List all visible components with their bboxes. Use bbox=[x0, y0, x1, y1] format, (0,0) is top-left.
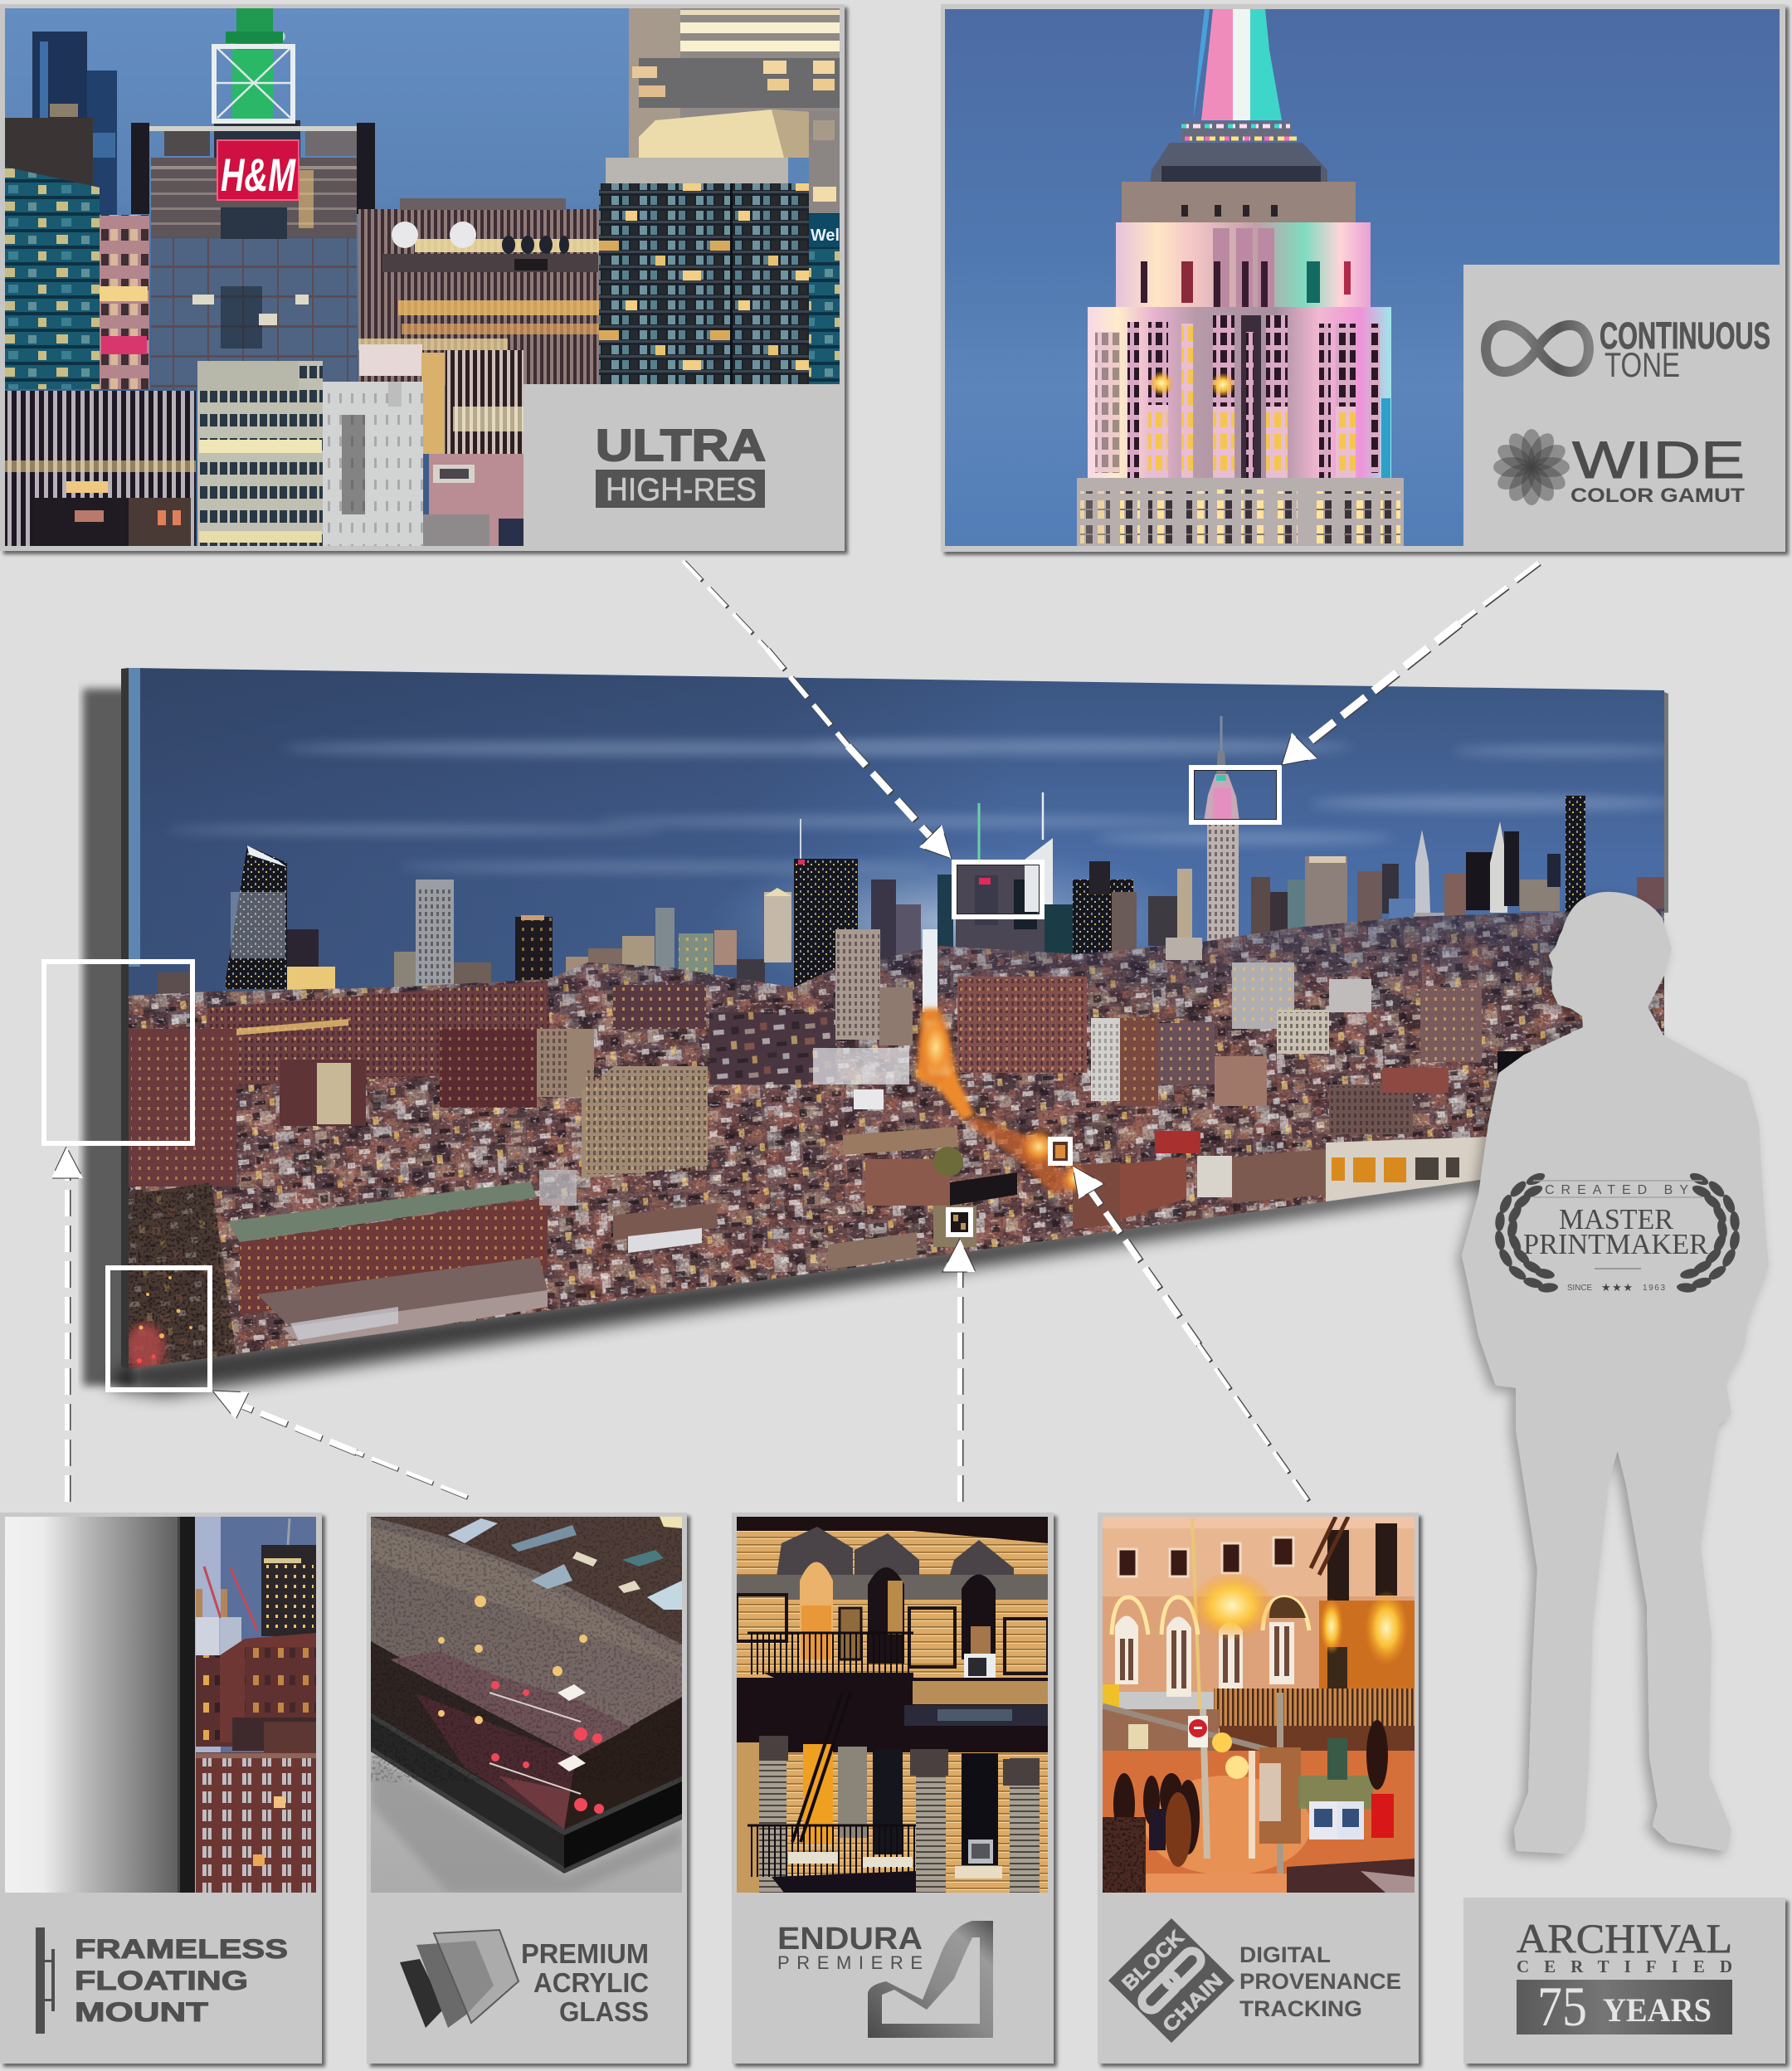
label: H&M sign: H&M bbox=[221, 149, 296, 201]
detail box: H&M building area bbox=[954, 862, 1042, 917]
panel: continuous tone and wide colour gamut detail bbox=[941, 4, 1785, 552]
icon: blockchain diamond: CHAIN bbox=[1158, 1969, 1228, 2037]
label: premium acrylic glass: PREMIUM bbox=[521, 1938, 649, 1969]
label: frameless floating mount: FRAMELESS bbox=[75, 1934, 288, 1964]
label: endura premiere: ENDURA bbox=[777, 1922, 923, 1956]
label: premium acrylic glass bbox=[400, 1930, 649, 2028]
badge: master printmaker: CREATED BY bbox=[1545, 1183, 1688, 1197]
badge: master printmaker bbox=[1493, 1171, 1741, 1294]
arrow: to ultra high-res panel detail bbox=[683, 561, 952, 859]
label box: continuous tone and wide colour gamut: WIDE bbox=[1572, 431, 1745, 490]
badge: master printmaker: SINCE bbox=[1567, 1284, 1592, 1293]
panel: archival certified 75 years: ARCHIVAL bbox=[1517, 1915, 1732, 1961]
wall shadow behind canvas bbox=[83, 689, 1668, 1396]
city mass bbox=[129, 900, 1664, 1373]
panel: archival certified 75 years: CERTIFIED bbox=[1517, 1956, 1732, 1976]
icon: flower bbox=[1493, 429, 1570, 505]
icon: acrylic layers bbox=[400, 1930, 519, 2028]
photo: acrylic corner bbox=[371, 1517, 682, 1893]
label: frameless floating mount: FLOATING bbox=[75, 1966, 248, 1995]
badge: master printmaker: PRINTMAKER bbox=[1523, 1228, 1709, 1260]
photo: street corner at dusk bbox=[1103, 1517, 1415, 1893]
label: frameless floating mount: MOUNT bbox=[75, 1997, 209, 2027]
panel: ultra high-res detail bbox=[0, 4, 845, 551]
label: digital provenance tracking bbox=[1108, 1918, 1401, 2043]
arrow: to wide colour gamut panel detail bbox=[1282, 563, 1540, 765]
label: digital provenance tracking: TRACKING bbox=[1239, 1996, 1362, 2021]
badge: master printmaker: MASTER bbox=[1559, 1203, 1674, 1235]
detail box: street corner bbox=[1050, 1139, 1070, 1163]
trees and lit street at the lower left corner bbox=[125, 1182, 236, 1373]
photo: midtown buildings with H&M sign bbox=[5, 8, 840, 546]
label: frameless floating mount bbox=[36, 1927, 288, 2034]
panel: archival certified 75 years: YEARS bbox=[1603, 1991, 1712, 2029]
panel: archival certified 75 years: 75 bbox=[1537, 1975, 1587, 2038]
detail box: acrylic corner bbox=[108, 1268, 210, 1390]
label box: continuous tone and wide colour gamut: TONE bbox=[1605, 345, 1680, 384]
icon: ribbon check mark bbox=[868, 1921, 993, 2038]
photo: mount side view bbox=[5, 1517, 316, 1893]
detail box: facade bbox=[948, 1210, 971, 1235]
detail box: Empire State Building bbox=[1191, 767, 1279, 822]
Empire State Building in skyline bbox=[1204, 716, 1239, 944]
printed image below the glass bbox=[371, 1641, 682, 1830]
arrow: from acrylic panel bbox=[212, 1391, 468, 1498]
icon: blockchain diamond bbox=[1108, 1918, 1234, 2043]
panel: panoramic canvas of the Manhattan skyline bbox=[121, 668, 1684, 1373]
badge: master printmaker: ★★★ bbox=[1601, 1281, 1633, 1294]
label box: continuous tone and wide colour gamut bbox=[1463, 265, 1785, 552]
glass haze layer bbox=[371, 1517, 682, 1757]
far skyline bbox=[158, 716, 1664, 1024]
panel: frameless floating mount bbox=[0, 1513, 322, 2064]
sky bbox=[129, 668, 1664, 996]
arrow: from digital provenance panel bbox=[1073, 1166, 1309, 1501]
label: endura premiere bbox=[777, 1921, 993, 2038]
large city buildings bbox=[125, 929, 1553, 1373]
icon: infinity ribbon bbox=[1486, 325, 1589, 372]
icon: left laurel bbox=[1493, 1171, 1558, 1294]
icon: right laurel bbox=[1677, 1171, 1741, 1294]
label box: continuous tone and wide colour gamut: COLOR GAMUT bbox=[1570, 485, 1745, 507]
photo: midtown buildings with H&M sign: Wel bbox=[811, 227, 840, 245]
panel: premium acrylic glass bbox=[367, 1513, 687, 2064]
photo: brick facade with fire escape bbox=[737, 1517, 1048, 1893]
icon: mount profile bbox=[36, 1927, 55, 2034]
panel: archival certified 75 years bbox=[1463, 1898, 1785, 2064]
label box: ultra high-res: ULTRA bbox=[596, 421, 766, 470]
canvas side edge bbox=[121, 668, 129, 1369]
photo: Empire State Building lit in colour bbox=[945, 9, 1780, 546]
lit avenue bbox=[916, 929, 1088, 1195]
label: digital provenance tracking: DIGITAL bbox=[1239, 1942, 1331, 1967]
label box: ultra high-res bbox=[523, 384, 845, 551]
detail box: floating mount edge bbox=[44, 962, 192, 1143]
person silhouette with master printmaker badge bbox=[1464, 894, 1766, 1851]
label box: ultra high-res: HIGH-RES bbox=[606, 472, 757, 508]
panel: endura premiere bbox=[732, 1513, 1054, 2064]
arrow: from endura premiere panel bbox=[942, 1239, 976, 1502]
label: endura premiere: PREMIERE bbox=[777, 1952, 923, 1973]
arrow: from frameless mount panel bbox=[51, 1147, 83, 1502]
icon: blockchain diamond: BLOCK bbox=[1118, 1926, 1189, 1995]
badge: master printmaker: 1963 bbox=[1643, 1284, 1665, 1293]
label: digital provenance tracking: PROVENANCE bbox=[1239, 1969, 1401, 1994]
panel: digital provenance tracking bbox=[1098, 1513, 1419, 2064]
label: premium acrylic glass: GLASS bbox=[559, 1996, 649, 2027]
label: premium acrylic glass: ACRYLIC bbox=[533, 1967, 649, 1998]
